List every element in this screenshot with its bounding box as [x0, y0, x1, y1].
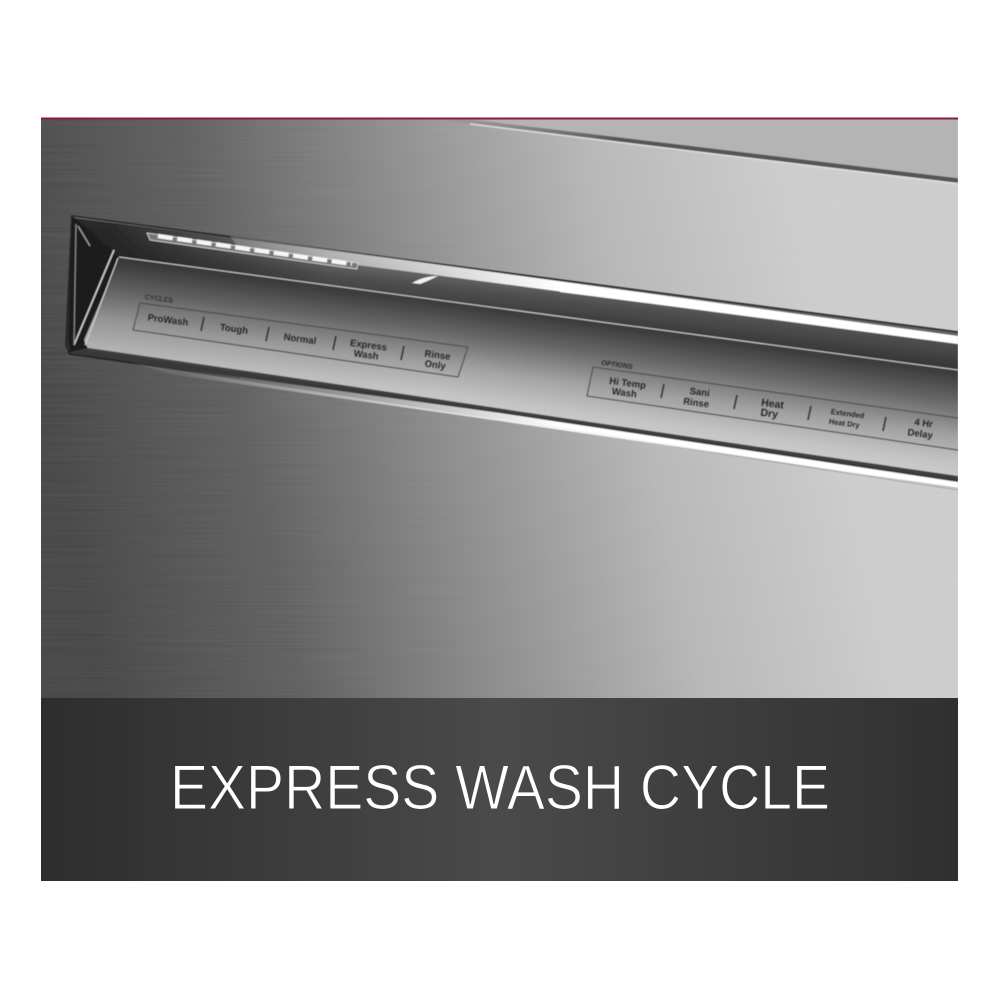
options button outline: [587, 367, 965, 451]
option: Heat Dry: Heat: [760, 397, 785, 412]
option: 4 Hr Delay: 4 Hr: [914, 417, 934, 430]
option: Sani Rinse: Sani: [689, 386, 710, 399]
red top rule: [41, 118, 958, 120]
cycle: Tough: Tough: [219, 322, 249, 337]
lower dark seam: [87, 347, 714, 440]
cycle: Express Wash: Wash: [353, 348, 379, 363]
lower white lip: [130, 362, 958, 488]
option: Heat Dry: Dry: [760, 407, 779, 421]
recess left dark wedge: [68, 216, 118, 352]
cycles button outline: [133, 303, 468, 377]
recess upper left shadow: [75, 218, 300, 278]
separator 2: [266, 327, 269, 341]
panel left edge: [85, 258, 118, 345]
title: EXPRESS WASH CYCLE: [170, 753, 830, 823]
option: Extended Heat Dry: Heat Dry: [828, 417, 861, 430]
cycle: Rinse Only: Rinse: [424, 349, 451, 363]
inner control panel: [84, 257, 958, 476]
infographic canvas: [41, 118, 958, 881]
upper white lip: [230, 236, 958, 344]
title banner: [41, 698, 958, 881]
top door gap and strip: [458, 120, 958, 184]
panel shading: [84, 266, 298, 378]
separator 4: [401, 346, 404, 360]
recess outline: [66, 216, 958, 378]
options group: [587, 360, 965, 451]
panel top edge: [119, 257, 958, 370]
cycle: ProWash: ProWash: [147, 312, 189, 329]
separator 5: [661, 384, 664, 398]
upper lip shine: [560, 291, 726, 314]
cycles group: [133, 294, 468, 377]
banner background: [41, 698, 958, 881]
separator 1: [201, 317, 204, 331]
cycle: Rinse Only: Only: [424, 359, 447, 372]
cycle: Express Wash: Express: [349, 338, 388, 354]
left edge line: [74, 224, 76, 345]
lower lip thin line: [557, 428, 958, 490]
separator 3: [333, 336, 336, 350]
option: Sani Rinse: Rinse: [683, 396, 710, 410]
option: 4 Hr Delay: Delay: [907, 427, 934, 442]
cycles heading: CYCLES: [144, 294, 174, 305]
brushed steel door: [41, 118, 958, 698]
separator 7: [808, 406, 811, 420]
option: Hi Temp Wash: Hi Temp: [609, 376, 647, 392]
options heading: OPTIONS: [601, 360, 633, 371]
small handle highlight: [412, 276, 438, 284]
recess left bevel highlight: [78, 226, 90, 246]
cycle: Normal: Normal: [283, 332, 317, 347]
left inner highlight: [74, 250, 114, 345]
photo: stainless control panel: [41, 118, 965, 698]
option: Hi Temp Wash: Wash: [611, 386, 638, 400]
recess body: [66, 216, 958, 490]
option: Extended Heat Dry: Extended: [830, 407, 865, 420]
brushed texture: [54, 235, 156, 634]
separator 8: [883, 417, 886, 431]
recessed handle: [66, 216, 958, 490]
LED strip: [147, 233, 358, 269]
separator 6: [734, 395, 737, 409]
